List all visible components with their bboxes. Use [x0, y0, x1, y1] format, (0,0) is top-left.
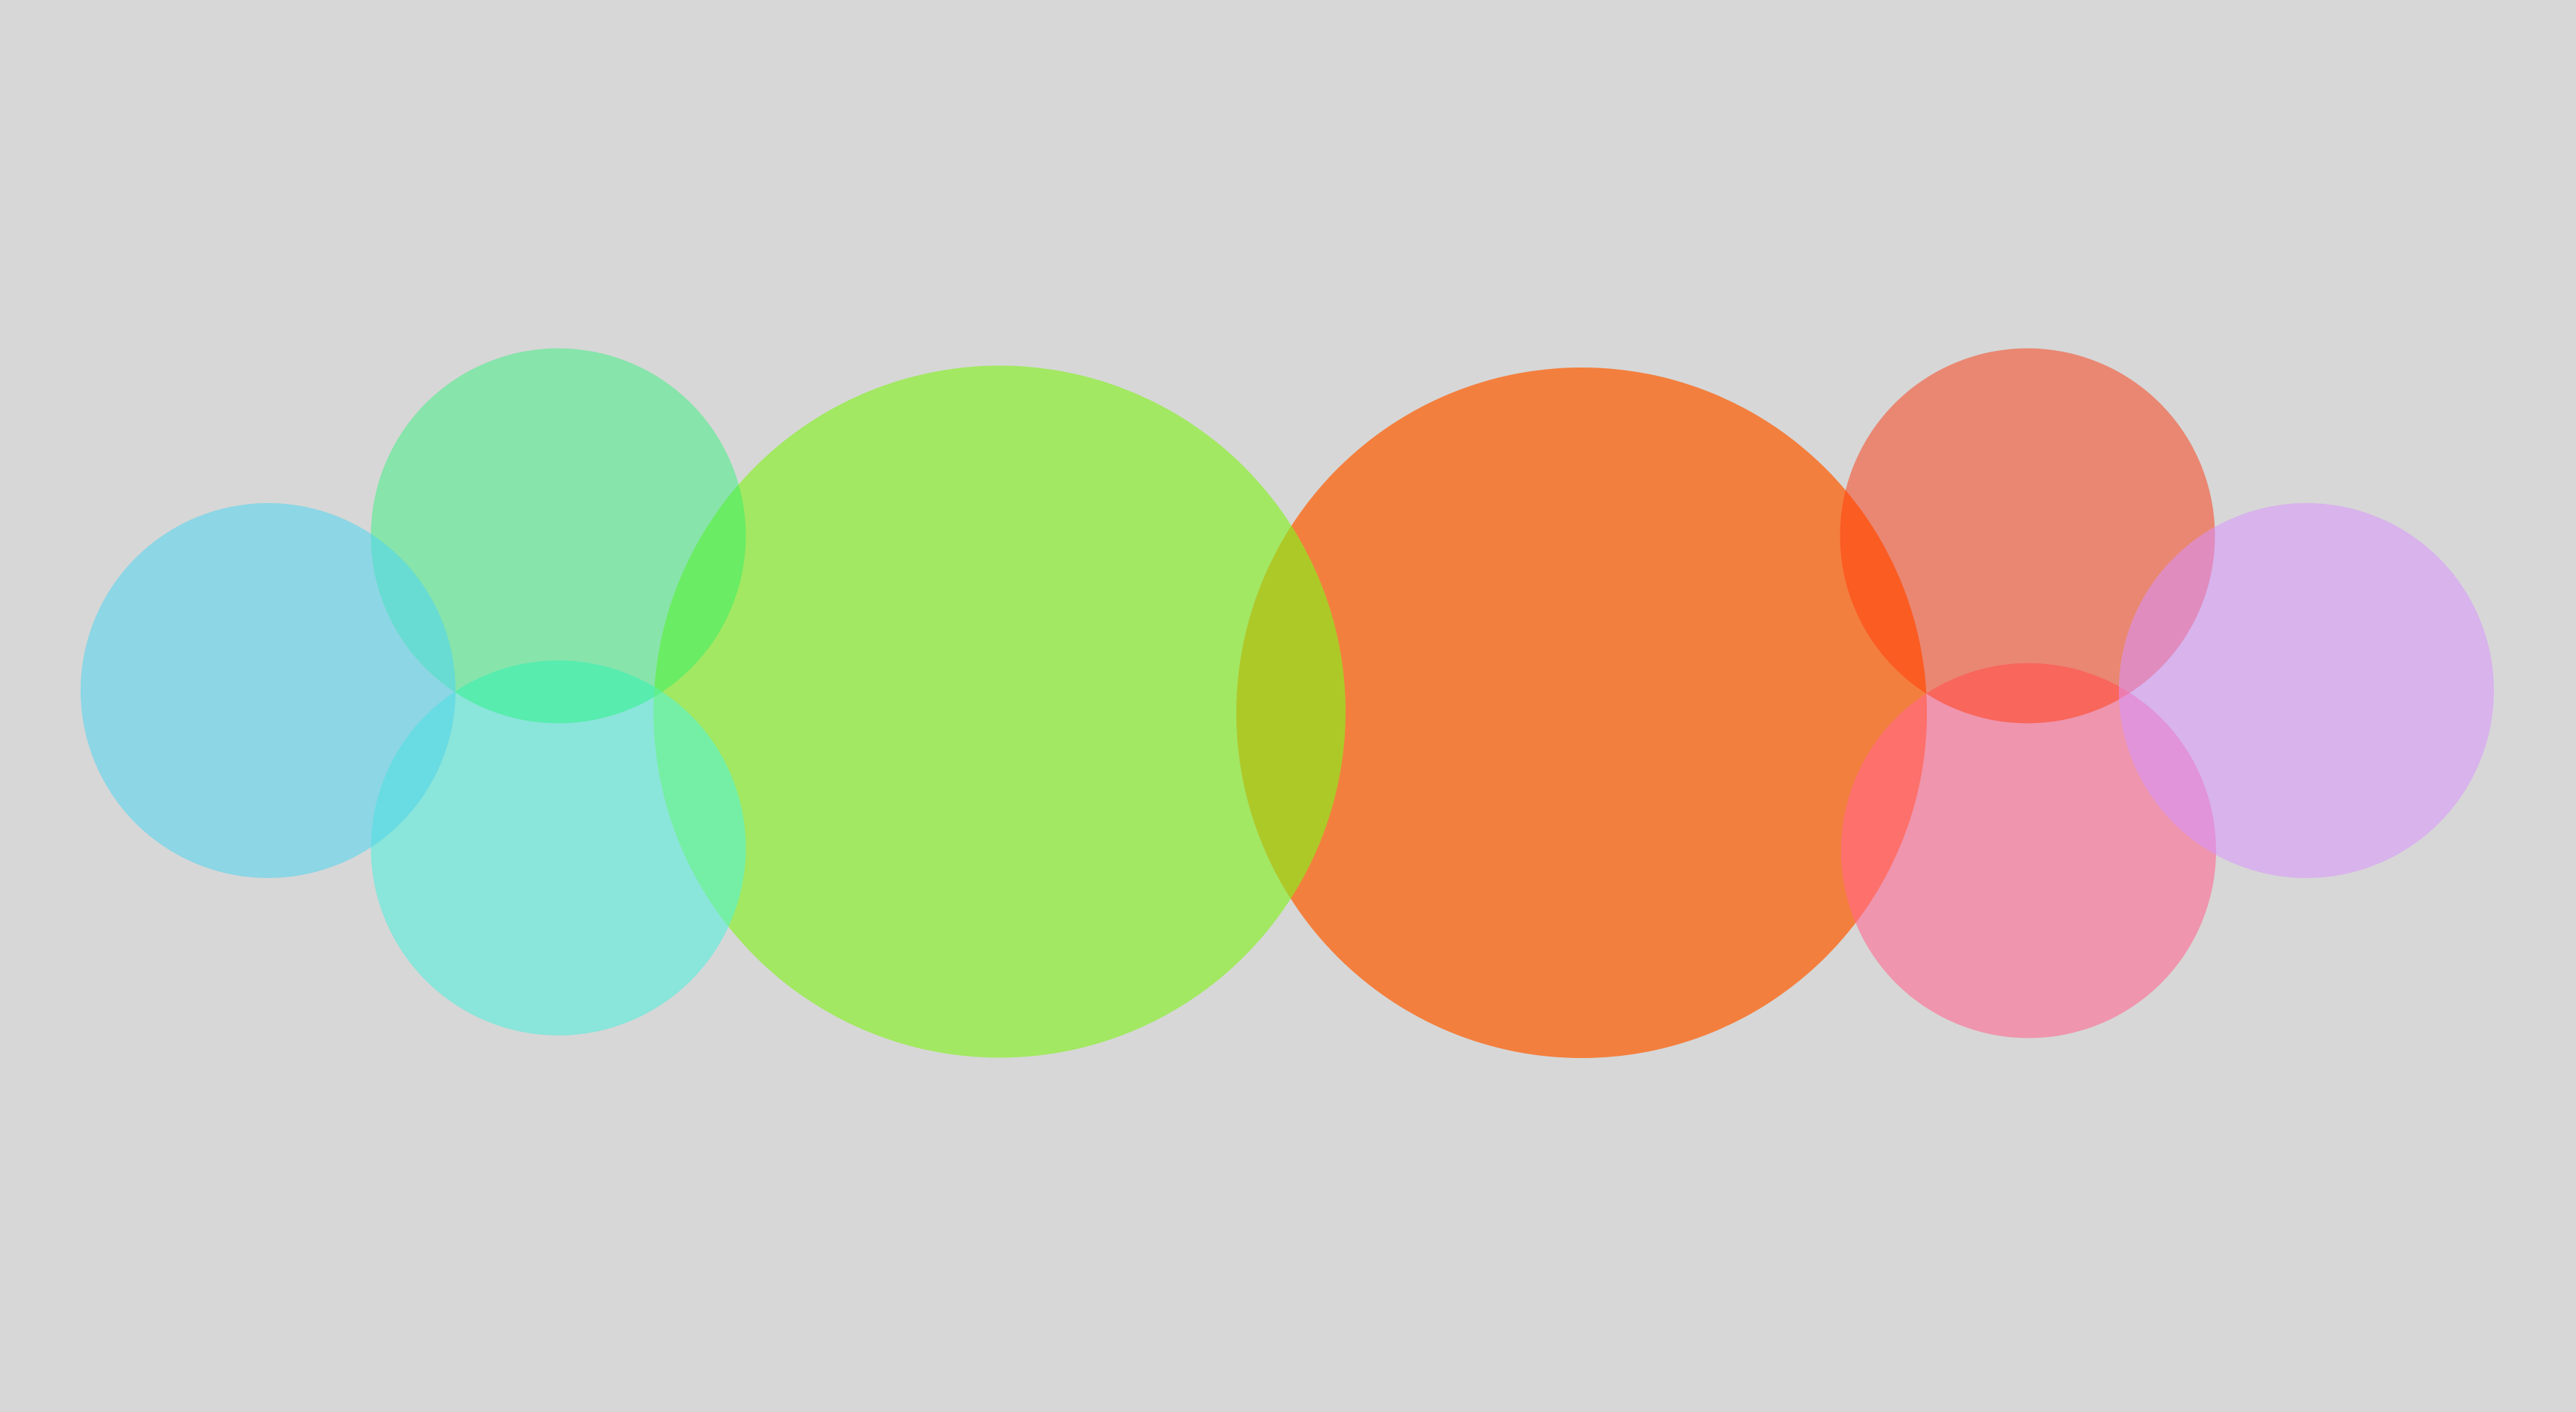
- overlap: pink and purple: [2119, 687, 2216, 855]
- circle: green: [370, 348, 745, 723]
- overlap: salmon and pink: [1926, 663, 2119, 723]
- overlap: lime and orange: [1236, 526, 1346, 899]
- circle: salmon: [1840, 348, 2215, 723]
- circle: pink: [1841, 663, 2216, 1038]
- overlap: green and lime: [654, 485, 745, 691]
- overlap: green, teal and lime: [654, 687, 663, 697]
- circle: blue: [81, 503, 456, 878]
- overlap: salmon and purple: [2119, 527, 2215, 699]
- overlap: orange and salmon: [1840, 490, 1926, 694]
- circle: lime: [654, 366, 1346, 1057]
- overlap: blue and teal: [370, 692, 456, 847]
- overlap: salmon, pink and purple: [2119, 687, 2129, 699]
- overlap: green and teal: [455, 660, 662, 723]
- overlap: orange and pink: [1841, 694, 1927, 923]
- overlap: teal and lime: [654, 687, 745, 926]
- circle: purple: [2119, 503, 2494, 878]
- circle: teal: [370, 660, 745, 1035]
- circle: orange: [1236, 367, 1927, 1058]
- overlapping circles diagram: [81, 348, 2494, 1058]
- overlap: blue and green: [370, 534, 456, 691]
